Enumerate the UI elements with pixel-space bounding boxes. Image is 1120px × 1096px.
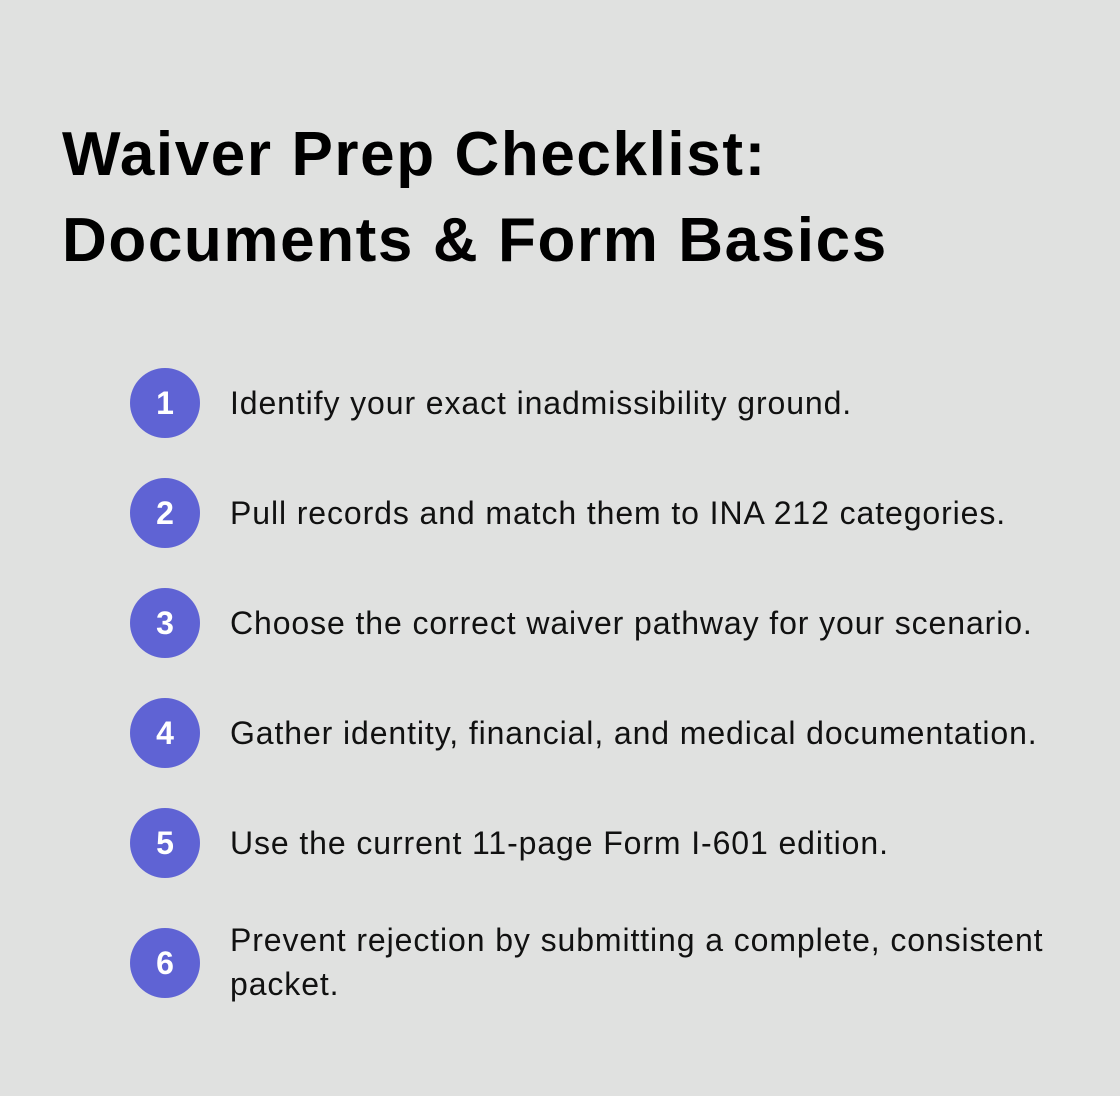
item 1	[130, 368, 852, 438]
item 5	[130, 808, 889, 878]
item 1: Identify your exact inadmissibility ground.	[230, 385, 852, 421]
item 2	[130, 478, 1006, 548]
title	[62, 120, 888, 275]
item 4: 4	[156, 715, 174, 751]
item 6: Prevent rejection by submitting a complete, consistent	[230, 922, 1043, 958]
item 4	[130, 698, 1038, 768]
item 5: 5	[156, 825, 174, 861]
item 4: Gather identity, financial, and medical documentation.	[230, 715, 1038, 751]
item 6: 6	[156, 945, 174, 981]
item 3: Choose the correct waiver pathway for your scenario.	[230, 605, 1033, 641]
item 1: 1	[156, 385, 174, 421]
item 5: Use the current 11-page Form I-601 edition.	[230, 825, 889, 861]
item 2: 2	[156, 495, 174, 531]
item 3	[130, 588, 1033, 658]
item 6: packet.	[230, 966, 339, 1002]
item 2: Pull records and match them to INA 212 categories.	[230, 495, 1006, 531]
item 6	[130, 922, 1043, 1002]
item 3: 3	[156, 605, 174, 641]
title: Documents & Form Basics	[62, 206, 888, 275]
title: Waiver Prep Checklist:	[62, 120, 767, 189]
